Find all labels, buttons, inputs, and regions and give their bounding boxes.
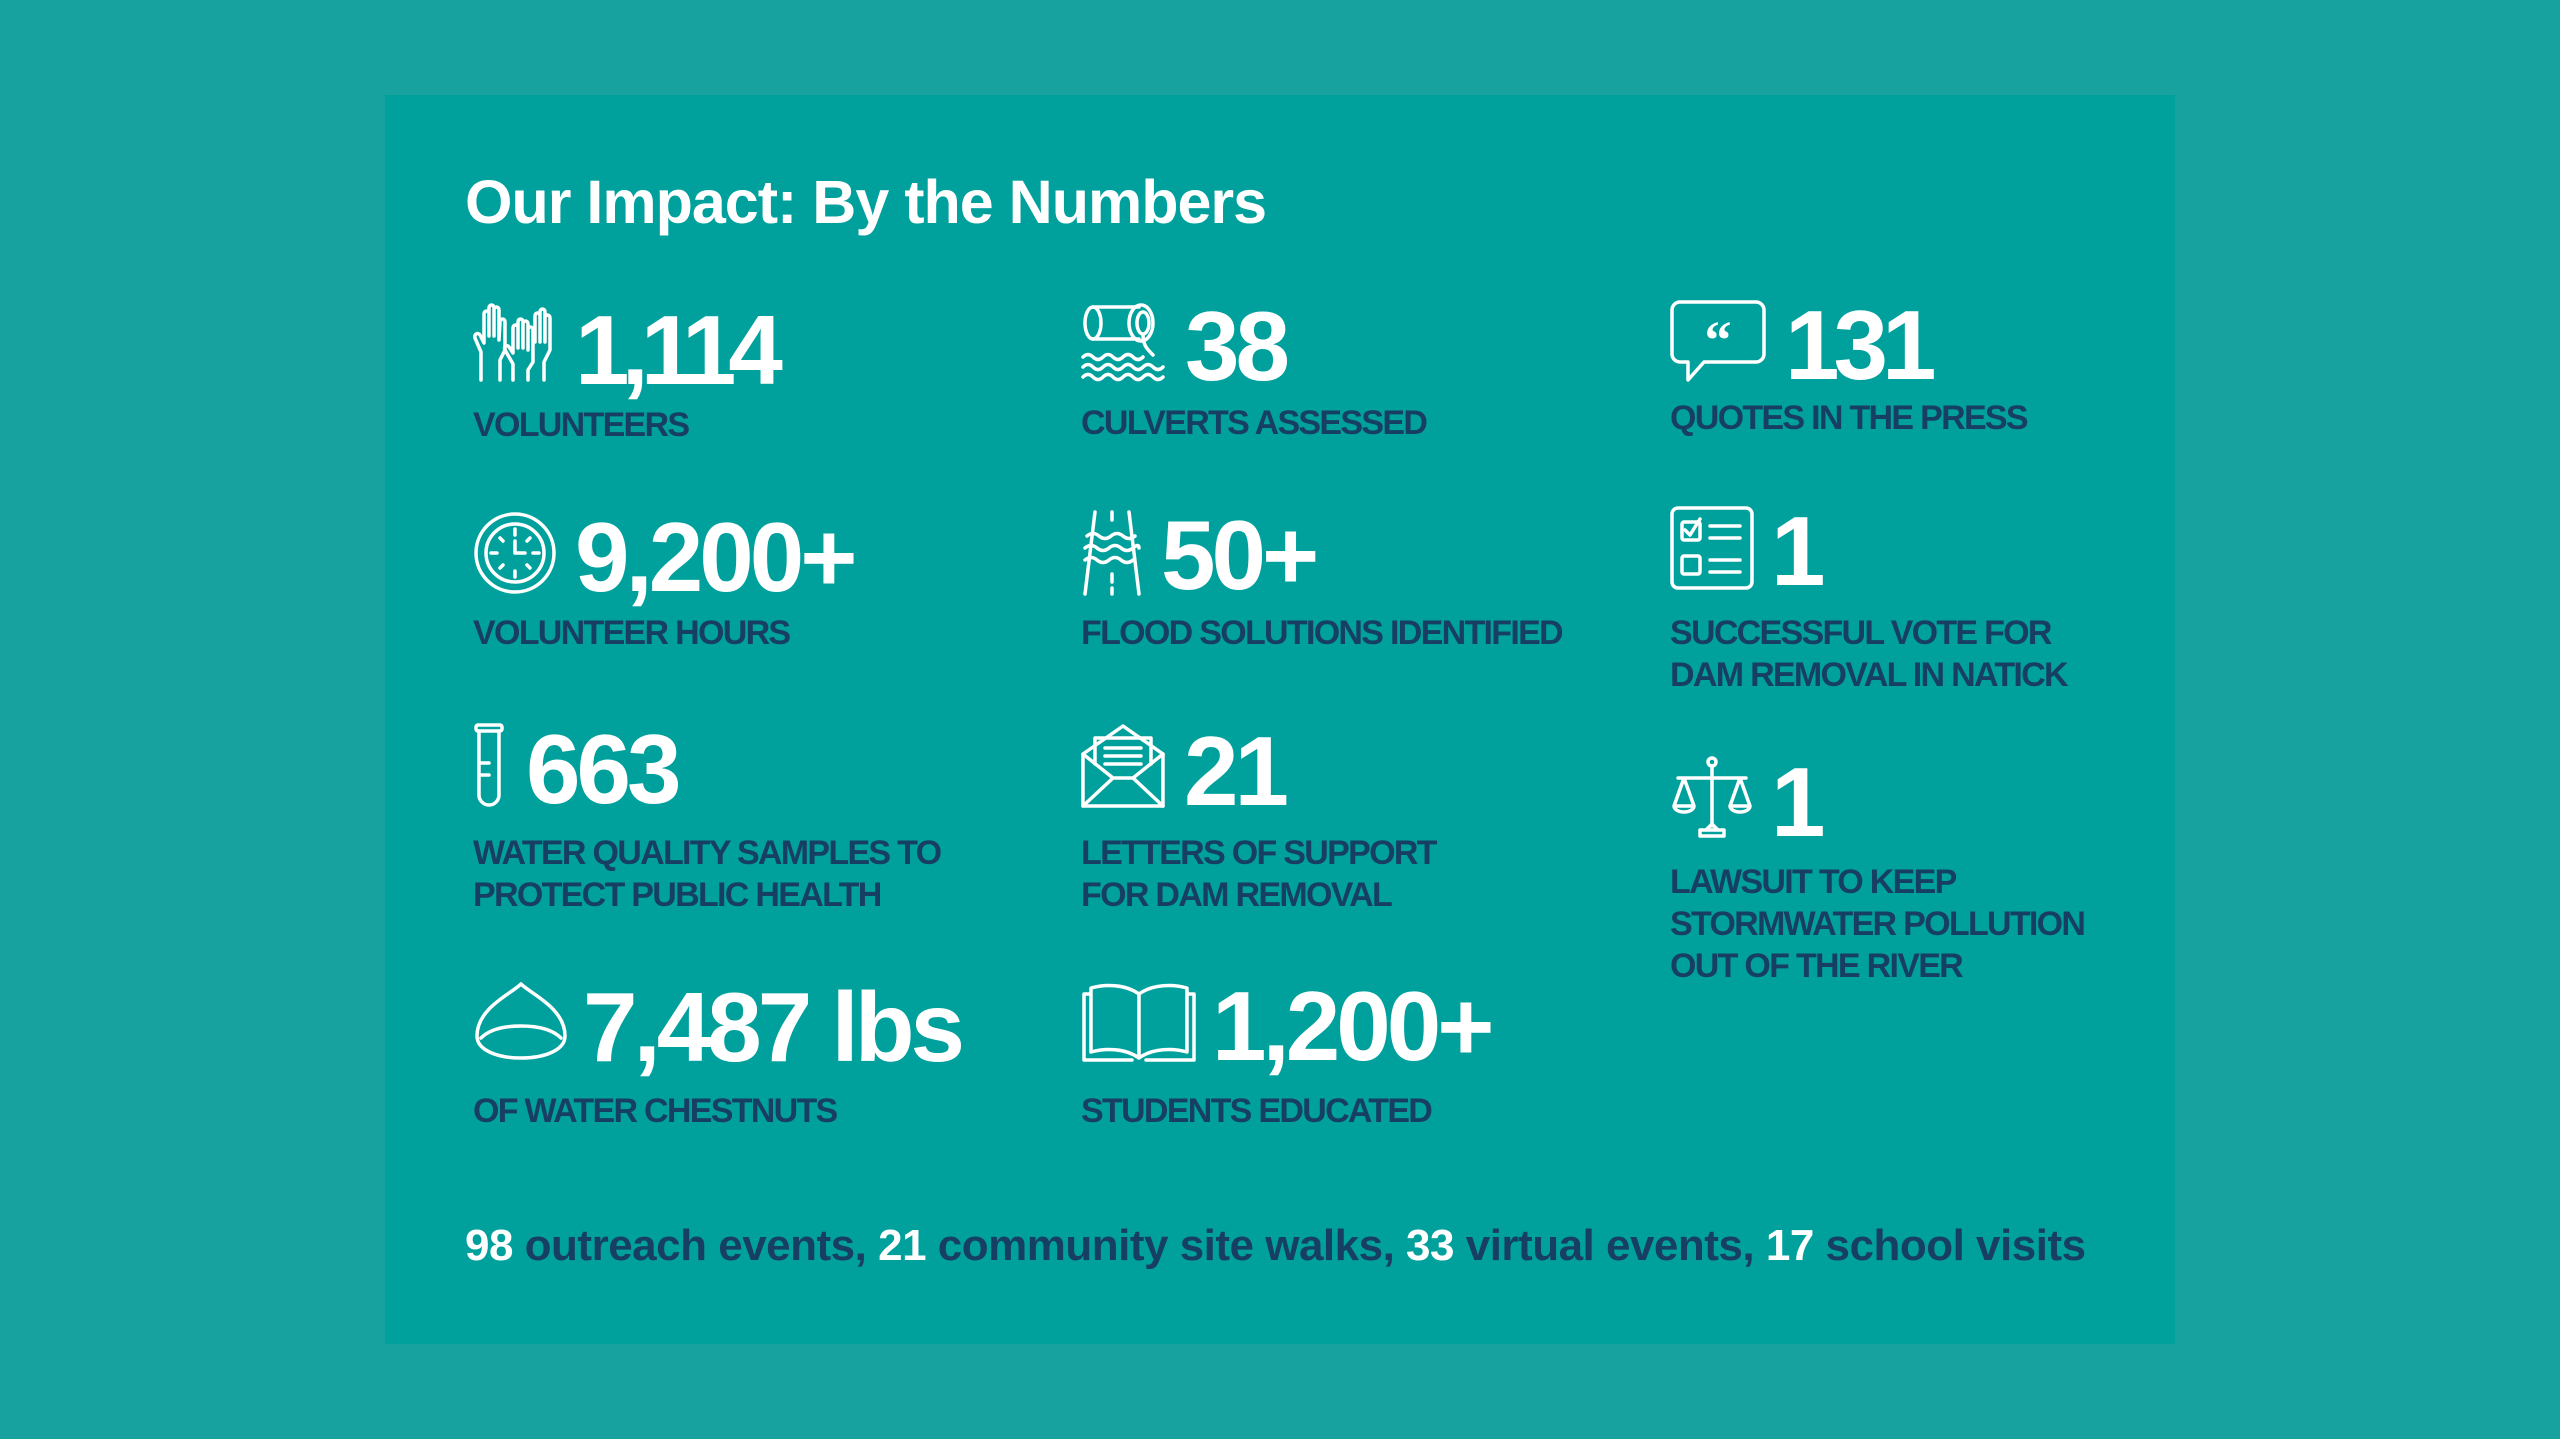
label: FOR DAM REMOVAL	[1081, 876, 1391, 914]
label	[473, 834, 941, 914]
label	[1670, 863, 2084, 985]
stat: culverts	[1081, 291, 1426, 442]
icon: speech bubble: “	[1704, 310, 1732, 370]
panel: main	[385, 95, 2175, 1344]
icon: hands	[473, 303, 552, 382]
stat: water chestnuts	[473, 972, 961, 1130]
number: 38	[1185, 291, 1286, 401]
icon: flooded road	[1083, 510, 1141, 596]
stat: students educated	[1081, 971, 1490, 1130]
stat: quotes in press	[1670, 290, 2028, 437]
icon: speech bubble	[1670, 300, 1766, 382]
stat: lawsuit	[1670, 747, 2084, 985]
stat: flood solutions	[1081, 500, 1562, 652]
icon: envelope	[1081, 724, 1165, 808]
number: 9,200+	[575, 502, 853, 612]
label: PROTECT PUBLIC HEALTH	[473, 876, 881, 914]
label: STORMWATER POLLUTION	[1670, 905, 2084, 943]
label: SUCCESSFUL VOTE FOR	[1670, 614, 2051, 652]
stat: water quality samples	[473, 714, 941, 914]
icon: open book	[1082, 984, 1196, 1062]
label	[1081, 834, 1437, 914]
icon: culvert	[1081, 303, 1165, 382]
footer summary: 98 outreach events, 21 community site walks, 33 virtual events, 17 school visits	[465, 1221, 2086, 1270]
number: 21	[1184, 716, 1285, 826]
number: 663	[526, 714, 678, 824]
label: VOLUNTEER HOURS	[473, 614, 789, 652]
icon: chestnut	[475, 982, 567, 1060]
number: 1,200+	[1212, 971, 1490, 1081]
icon: checklist	[1670, 506, 1754, 590]
label: STUDENTS EDUCATED	[1081, 1092, 1431, 1130]
icon: clock	[474, 512, 556, 594]
icon: test tube	[474, 723, 504, 807]
label: DAM REMOVAL IN NATICK	[1670, 656, 2067, 694]
stat: letters of support	[1081, 716, 1437, 914]
title: Our Impact: By the Numbers	[465, 168, 1266, 236]
stat: successful vote	[1670, 496, 2068, 694]
number: 50+	[1161, 500, 1315, 610]
label: WATER QUALITY SAMPLES TO	[473, 834, 940, 872]
number: 131	[1785, 290, 1931, 400]
label: FLOOD SOLUTIONS IDENTIFIED	[1081, 614, 1562, 652]
label: CULVERTS ASSESSED	[1081, 404, 1426, 442]
number: 1,114	[575, 295, 775, 405]
number: 1	[1771, 496, 1822, 606]
label	[1670, 614, 2068, 694]
label: OUT OF THE RIVER	[1670, 947, 1962, 985]
label: LAWSUIT TO KEEP	[1670, 863, 1956, 901]
label: LETTERS OF SUPPORT	[1081, 834, 1436, 872]
stat: volunteers	[473, 295, 782, 444]
number: 1	[1771, 747, 1822, 857]
label: VOLUNTEERS	[473, 406, 688, 444]
icon: scales	[1672, 756, 1752, 838]
stat: volunteer hours	[473, 502, 854, 652]
number: 7,487 lbs	[583, 972, 961, 1082]
label: OF WATER CHESTNUTS	[473, 1092, 837, 1130]
label: QUOTES IN THE PRESS	[1670, 399, 2027, 437]
